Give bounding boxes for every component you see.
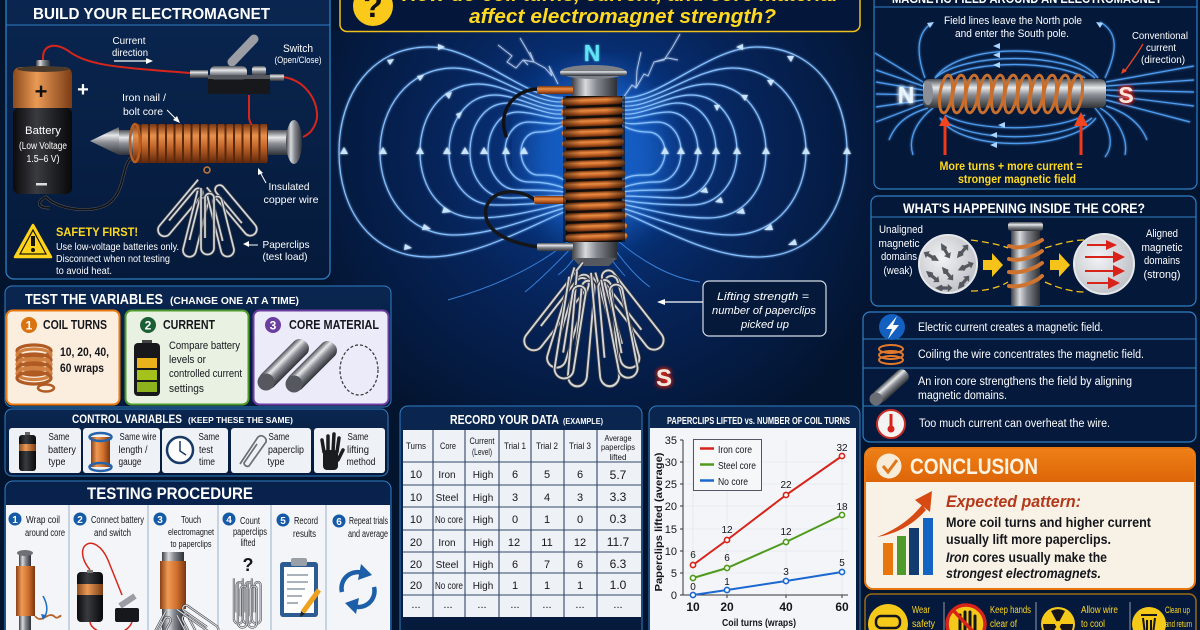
legend: Steel core <box>718 461 756 472</box>
icon: no core outline <box>340 345 378 395</box>
table rows: High <box>473 581 493 592</box>
table rows: ... <box>443 599 453 611</box>
y axis labels: 0 <box>671 590 677 602</box>
heading: RECORD YOUR DATA <box>450 412 559 427</box>
y axis labels: 35 <box>665 435 677 447</box>
table rows: 6 <box>577 559 583 571</box>
text: field direction note: and enter the South pole. <box>955 28 1069 40</box>
fact: coiling: Coiling the wire concentrates the magnetic field. <box>918 349 1144 361</box>
table header: Core <box>440 441 456 451</box>
table header: paperclips <box>601 442 635 452</box>
table header: Trial 3 <box>569 441 591 451</box>
y axis labels: 25 <box>665 479 677 491</box>
step 3: 3 <box>157 515 163 526</box>
panel: inside the core <box>871 196 1196 306</box>
step 4: Count <box>240 516 260 527</box>
title text: affect electromagnet strength? <box>469 6 776 28</box>
small paperclips <box>155 167 259 258</box>
text: unaligned: magnetic <box>878 238 920 250</box>
fact: coiling <box>879 345 1144 364</box>
series: steel core: 6 <box>724 553 730 564</box>
table rows: 4 <box>544 492 550 504</box>
callout: lifting strength: Lifting strength = <box>717 291 810 303</box>
table rows: 5.7 <box>610 468 627 482</box>
icon: S pole: S <box>656 365 672 392</box>
table rows: ... <box>411 599 421 611</box>
table rows: 10 <box>410 514 422 526</box>
panel: safety reminders <box>865 594 1196 630</box>
text: conventional current: current <box>1146 43 1176 54</box>
panel: line chart <box>649 406 860 630</box>
step 3 <box>144 512 220 630</box>
heading: (CHANGE ONE AT A TIME) <box>170 296 299 307</box>
table rows: 10 <box>410 469 422 481</box>
control: battery type: Same <box>48 432 70 443</box>
table rows: ... <box>575 599 585 611</box>
reminder: cool wire: to cool <box>1081 619 1105 630</box>
heading: PAPERCLIPS LIFTED vs. NUMBER OF COIL TURNS <box>667 415 850 427</box>
current direction label: Current <box>112 35 146 47</box>
card: current: Compare battery <box>169 340 240 352</box>
panel: build your electromagnet <box>6 0 330 279</box>
heading: TESTING PROCEDURE <box>87 484 253 503</box>
step 5: 5 <box>280 516 286 527</box>
step 1 <box>8 512 65 630</box>
card: core material <box>254 310 388 404</box>
heading: CONTROL VARIABLES <box>72 414 182 426</box>
switch label <box>274 43 322 65</box>
paperclips label <box>243 239 310 263</box>
panel: conclusion <box>865 448 1195 589</box>
card: current: settings <box>169 383 204 395</box>
series: iron core: 6 <box>690 550 696 561</box>
table rows: 3.3 <box>610 490 627 504</box>
iron core label <box>122 92 180 123</box>
lightning <box>498 34 680 98</box>
card: coil turns <box>6 310 120 404</box>
table rows: 12 <box>508 537 520 549</box>
field direction arrows <box>340 44 851 250</box>
safety note: to avoid heat. <box>56 266 112 277</box>
text: conclusion body: Iron cores usually make the <box>946 549 1107 565</box>
step 1: around core <box>25 528 65 539</box>
paperclip bundle <box>520 262 667 387</box>
control: wire gauge: gauge <box>118 457 142 468</box>
icon: battery <box>13 60 72 194</box>
reminder: hands clear: Keep hands <box>990 605 1031 616</box>
callout: lifting strength: picked up <box>740 319 789 331</box>
table rows: 20 <box>410 559 422 571</box>
control: paperclip type: paperclip <box>268 445 304 456</box>
callout: lifting strength <box>657 281 826 336</box>
heading: TEST THE VARIABLES <box>25 291 163 308</box>
control: paperclip type: Same <box>268 432 290 443</box>
text: aligned: domains <box>1144 255 1180 267</box>
control: paperclip type <box>231 428 311 473</box>
series: no core: 5 <box>839 558 845 569</box>
table rows: 6 <box>512 559 518 571</box>
y axis labels: 15 <box>665 524 677 536</box>
table rows: 10 <box>410 492 422 504</box>
icon: nail with coil <box>90 120 302 164</box>
text: conclusion body <box>946 492 1151 581</box>
text: conventional current: (direction) <box>1141 55 1185 66</box>
table rows: 12 <box>574 537 586 549</box>
paperclips label: (test load) <box>262 251 308 263</box>
series: iron core <box>690 443 848 568</box>
text: stronger field <box>940 159 1082 186</box>
fact: current: Electric current creates a magnetic field. <box>918 322 1103 334</box>
table rows: High <box>473 538 493 549</box>
icon: N label: N <box>898 82 914 108</box>
coil turns <box>937 74 1085 114</box>
text: aligned <box>1142 228 1183 281</box>
y axis labels: 5 <box>671 568 677 580</box>
series: iron core: 22 <box>780 480 792 491</box>
yellow dashed guides <box>971 240 1085 292</box>
table rows: High <box>473 470 493 481</box>
control: battery type: type <box>48 457 66 468</box>
arrows: yellow flow <box>983 253 1070 277</box>
icon: coil <box>17 345 54 392</box>
text: aligned: (strong) <box>1144 269 1180 281</box>
step 4: 4 <box>226 515 232 526</box>
reminder: goggles <box>868 604 935 630</box>
card: current <box>126 310 248 404</box>
table rows: ... <box>542 599 552 611</box>
x axis labels: 10 <box>686 600 700 614</box>
card: current: CURRENT <box>163 317 215 332</box>
table rows <box>410 468 630 611</box>
step 1: Wrap coil <box>26 515 60 526</box>
switch label: (Open/Close) <box>274 55 322 65</box>
panel: key facts list <box>863 312 1196 442</box>
panel: magnetic field around an electromagnet <box>874 0 1197 189</box>
fact: overheat <box>877 410 1110 438</box>
card: core material: CORE MATERIAL <box>289 317 379 332</box>
table rows: 3 <box>577 492 583 504</box>
fact: iron core: magnetic domains. <box>918 390 1007 402</box>
field lines <box>875 22 1194 157</box>
text: conventional current <box>1132 31 1188 66</box>
step 4 <box>222 512 267 628</box>
y axis labels: 20 <box>665 501 677 513</box>
series: iron core: 32 <box>836 443 848 454</box>
panel: testing procedure <box>5 481 391 630</box>
table rows: 1 <box>512 580 518 592</box>
text: unaligned: domains <box>881 251 917 263</box>
card: current: 2 <box>145 318 152 332</box>
card: current: controlled current <box>169 368 242 380</box>
reminder: cool wire <box>1041 605 1118 630</box>
text: conclusion body: strongest electromagnets. <box>946 565 1101 581</box>
series: no core <box>690 558 845 598</box>
fact: current <box>879 314 1103 340</box>
control: wire gauge: length / <box>118 445 148 456</box>
icon: iron and steel cylinders <box>256 336 340 394</box>
text: aligned: Aligned <box>1146 228 1178 240</box>
safety note: Disconnect when not testing <box>56 254 170 265</box>
fact: iron core <box>870 367 1132 406</box>
step 1: 1 <box>12 515 18 526</box>
legend: Iron core <box>718 445 752 456</box>
plus sign: + <box>77 79 89 101</box>
wire label <box>258 168 319 206</box>
fact: overheat: Too much current can overheat the wire. <box>919 418 1110 430</box>
icon: warning <box>15 225 51 257</box>
card: core material: 3 <box>270 318 277 332</box>
wire label: copper wire <box>264 194 319 206</box>
series: steel core <box>690 502 848 581</box>
text: unaligned: Unaligned <box>879 224 923 236</box>
table rows: 0 <box>512 514 518 526</box>
text: unaligned <box>878 224 923 277</box>
electromagnet core and flange <box>560 65 627 266</box>
x axis labels <box>686 600 849 614</box>
table rows: 6.3 <box>610 557 627 571</box>
table rows: 6 <box>577 469 583 481</box>
line chart <box>650 428 856 630</box>
card: coil turns: 60 wraps <box>60 363 104 375</box>
table rows: 20 <box>410 580 422 592</box>
step 5: Record <box>294 516 318 527</box>
table rows: 11.7 <box>607 535 630 549</box>
step 2: Connect battery <box>91 515 144 526</box>
reminder: clean up <box>1132 605 1192 630</box>
control: test time: test <box>199 445 213 456</box>
text: aligned: magnetic <box>1142 242 1183 254</box>
table rows: No core <box>435 515 463 526</box>
safety note: Use low-voltage batteries only. <box>56 242 179 253</box>
table rows: No core <box>435 581 463 592</box>
heading <box>25 291 299 308</box>
table rows: ... <box>477 599 487 611</box>
panel: record your data <box>400 406 642 630</box>
reminder: goggles: safety <box>912 619 935 630</box>
legend: No core <box>718 477 748 488</box>
table rows: 11 <box>541 537 553 549</box>
title text <box>402 0 838 28</box>
text: conclusion body: Expected pattern: <box>946 492 1081 511</box>
step 6: 6 <box>336 517 342 528</box>
icon: battery: (Low Voltage <box>19 141 67 152</box>
reminder: cool wire: Allow wire <box>1081 605 1118 616</box>
line chart: Paperclips lifted (average) <box>653 452 665 592</box>
control: lifting method: Same <box>348 432 369 443</box>
icon: battery: 1.5–6 V) <box>26 154 60 165</box>
left field lines <box>339 47 564 257</box>
table rows: 6 <box>512 469 518 481</box>
table rows: High <box>473 493 493 504</box>
step 5: results <box>293 529 316 540</box>
step 4: paperclips <box>233 527 267 538</box>
control: lifting method: method <box>346 457 376 468</box>
y axis labels <box>665 435 677 602</box>
table rows: 1.0 <box>610 578 627 592</box>
control: battery type <box>9 428 81 473</box>
legend <box>694 440 762 490</box>
switch label: Switch <box>283 43 313 55</box>
table header: Current <box>470 436 495 446</box>
table rows: 3 <box>512 492 518 504</box>
table rows: 1 <box>544 514 550 526</box>
text: stronger field: stronger magnetic field <box>958 172 1076 186</box>
text: conclusion body: More coil turns and higher current <box>946 514 1151 530</box>
step 3: Touch <box>181 515 201 526</box>
step 6: Repeat trials <box>349 516 388 527</box>
step 6: and average <box>348 529 388 540</box>
main electromagnet illustration with field lines <box>339 34 851 392</box>
card: coil turns: COIL TURNS <box>43 317 107 332</box>
heading: CONCLUSION <box>910 454 1038 479</box>
control: wire gauge: Same wire <box>120 432 157 443</box>
heading: (KEEP THESE THE SAME) <box>188 415 293 425</box>
step 3: to paperclips <box>170 539 212 550</box>
text: unaligned: (weak) <box>884 265 912 277</box>
series: steel core: 12 <box>780 527 792 538</box>
copper coil <box>561 96 628 242</box>
table rows: High <box>473 515 493 526</box>
table rows: Iron <box>438 538 456 549</box>
step 2: 2 <box>77 515 83 526</box>
icon: N pole: N <box>584 40 600 66</box>
wire label: Insulated <box>268 181 310 193</box>
heading <box>72 414 293 426</box>
iron core label: bolt core <box>123 106 163 118</box>
table rows: 5 <box>544 469 550 481</box>
control: test time: Same <box>198 432 220 443</box>
icon: rising bar chart <box>877 491 933 575</box>
text: field direction note: Field lines leave the North pole <box>944 15 1082 27</box>
reminder: hands clear: clear of <box>990 619 1017 630</box>
title box <box>340 0 860 32</box>
control: test time: time <box>199 457 215 468</box>
table header <box>406 433 635 462</box>
bar core <box>923 79 1106 108</box>
step 4: ? <box>242 555 254 575</box>
x axis labels: 60 <box>835 600 849 614</box>
text: conventional current: Conventional <box>1132 31 1188 42</box>
panel: test the variables <box>5 286 391 407</box>
table rows: 20 <box>410 537 422 549</box>
heading: (EXAMPLE) <box>563 417 603 426</box>
axis titles: Coil turns (wraps) <box>722 618 796 629</box>
step 5 <box>276 514 319 617</box>
icon: question mark <box>353 0 393 26</box>
control: lifting method: lifting <box>347 445 369 456</box>
table header: Average <box>604 433 632 443</box>
step 2: and switch <box>94 528 131 539</box>
control: test time <box>162 428 228 473</box>
icon: S label: S <box>1118 82 1134 108</box>
reminder: hands clear <box>947 605 1031 630</box>
icon: core with coil <box>1008 222 1043 306</box>
y axis labels: 10 <box>665 546 677 558</box>
heading: WHAT'S HAPPENING INSIDE THE CORE? <box>903 200 1145 216</box>
icon: battery: + <box>35 79 47 104</box>
series: no core: 0 <box>690 582 696 593</box>
series: iron core: 12 <box>721 525 733 536</box>
text: stronger field: More turns + more current = <box>940 159 1082 173</box>
table rows: Iron <box>438 470 456 481</box>
lower radiating field lines <box>448 240 700 300</box>
x axis labels: 20 <box>720 600 734 614</box>
field glow <box>526 70 666 240</box>
callout: lifting strength: number of paperclips <box>712 305 816 317</box>
icon: battery levels <box>134 340 160 396</box>
fact: iron core: An iron core strengthens the field by aligning <box>918 376 1132 388</box>
control: battery type: battery <box>48 445 76 456</box>
step 2 <box>74 512 144 630</box>
table header: lifted <box>610 452 627 462</box>
heading: BUILD YOUR ELECTROMAGNET <box>33 6 270 23</box>
table header: Trial 1 <box>504 441 526 451</box>
paperclips label: Paperclips <box>262 239 310 251</box>
table rows: ... <box>613 599 623 611</box>
y axis labels: 30 <box>665 457 677 469</box>
series: steel core: 18 <box>836 502 848 513</box>
card: current: levels or <box>169 354 206 366</box>
table rows: High <box>473 560 493 571</box>
black wire <box>39 156 135 210</box>
table rows: ... <box>510 599 520 611</box>
iron core label: Iron nail / <box>122 92 166 104</box>
current arrows <box>939 44 1143 155</box>
table rows: Steel <box>436 493 458 504</box>
table rows: 1 <box>577 580 583 592</box>
series: no core: 1 <box>724 577 730 588</box>
x axis labels: 40 <box>779 600 793 614</box>
text: field direction note <box>944 15 1082 40</box>
icon: check <box>876 454 902 478</box>
icon: switch <box>190 39 284 94</box>
safety note <box>56 225 179 277</box>
control: lifting method <box>314 428 385 473</box>
field arrows <box>927 22 1103 148</box>
control: wire gauge <box>83 428 160 473</box>
step 3: electromagnet <box>168 527 214 538</box>
table rows: 7 <box>544 559 550 571</box>
table rows: Steel <box>436 560 458 571</box>
safety note: SAFETY FIRST! <box>56 225 138 239</box>
icon: battery: Battery <box>25 125 62 137</box>
current direction label <box>112 35 153 64</box>
step 6 <box>332 514 388 614</box>
table rows: 1 <box>544 580 550 592</box>
control: paperclip type: type <box>268 457 285 468</box>
panel: control variables <box>5 409 388 476</box>
data table <box>403 430 641 617</box>
table rows: 0.3 <box>610 512 627 526</box>
icon: unaligned domains <box>919 235 977 293</box>
table header: Trial 2 <box>536 441 558 451</box>
icon: aligned domains <box>1074 234 1134 294</box>
card: coil turns: 10, 20, 40, <box>60 347 109 359</box>
step 4: lifted <box>240 538 256 549</box>
series: no core: 3 <box>783 567 789 578</box>
card: coil turns: 1 <box>26 318 33 332</box>
current direction label: direction <box>112 47 148 59</box>
table header: Turns <box>406 441 426 451</box>
table rows: 0 <box>577 514 583 526</box>
red wires <box>43 46 317 137</box>
reminder: goggles: Wear <box>912 605 931 616</box>
right field lines <box>622 47 847 257</box>
table header: (Level) <box>472 447 492 457</box>
text: conclusion body: usually lift more paperclips. <box>946 531 1111 547</box>
coil wire leads <box>486 86 573 251</box>
